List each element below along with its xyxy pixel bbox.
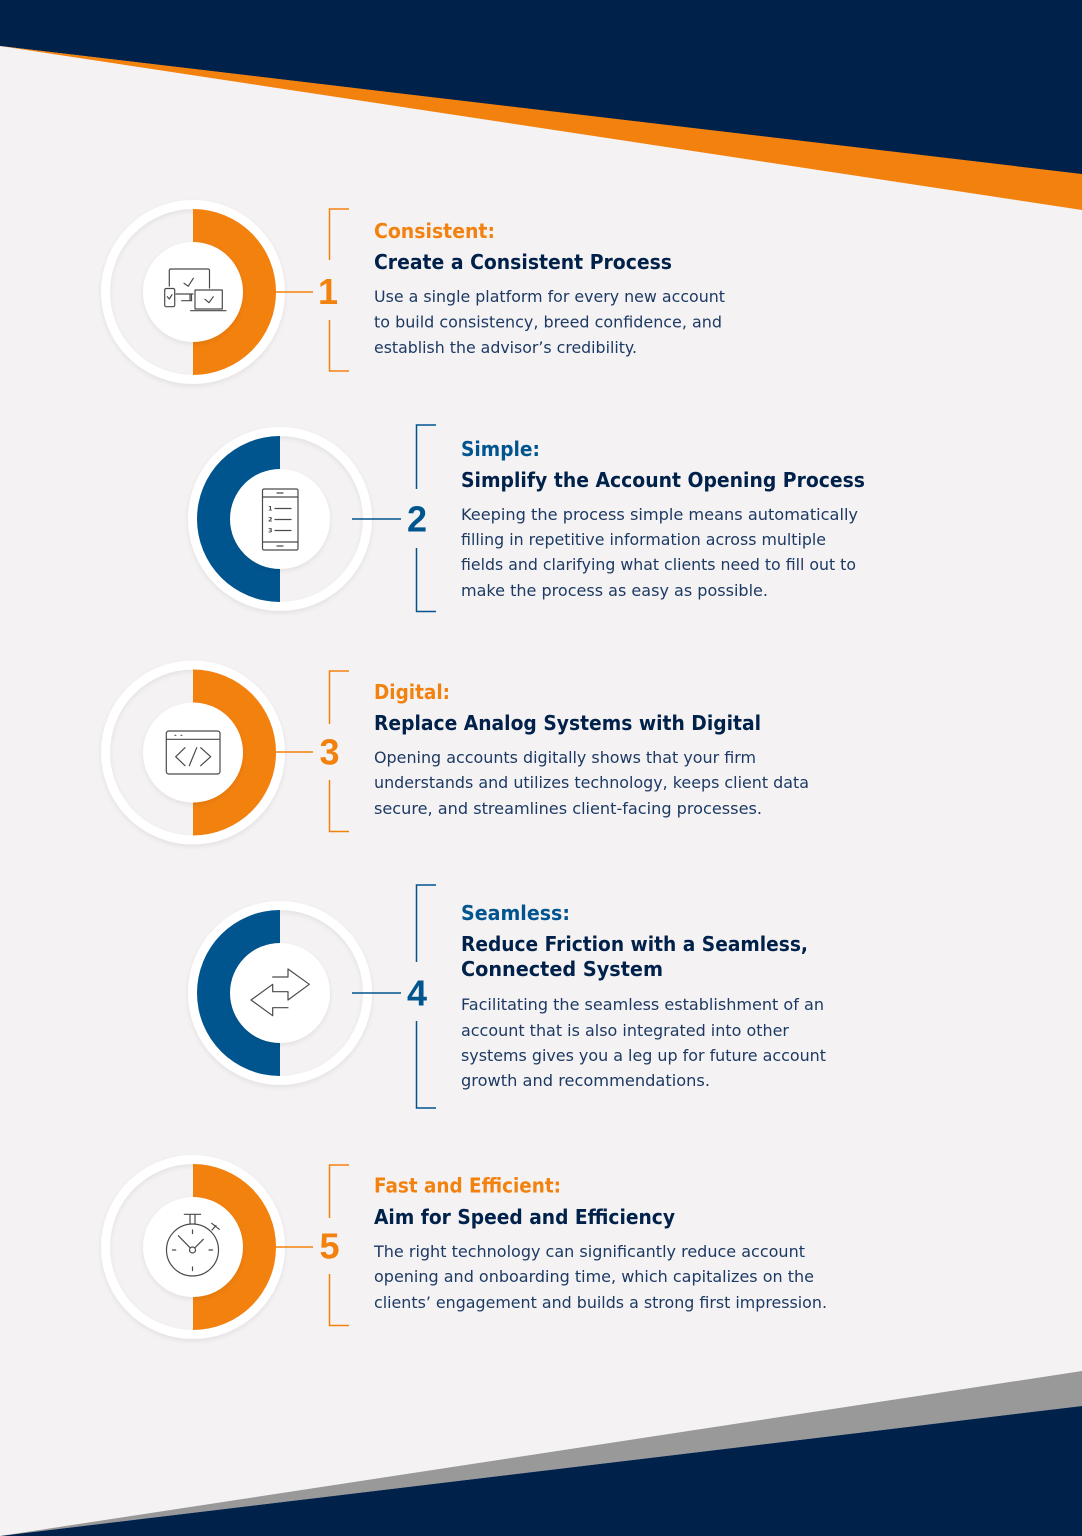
step 5 number: 5: [319, 1226, 340, 1266]
step 2 number: 2: [407, 498, 427, 540]
step 3 bracket: [330, 671, 349, 832]
step 2 connector: [352, 518, 401, 520]
step 4 text: [461, 901, 826, 1090]
step 5 text: opening and onboarding time, which capitalizes on the: [374, 1267, 814, 1286]
icon: phone with numbered list: 1: [268, 504, 273, 512]
step 1 bracket: [330, 209, 349, 371]
step 3 text: [374, 680, 809, 818]
step 1 text: Use a single platform for every new account: [374, 287, 725, 306]
step 4 text: Reduce Friction with a Seamless,: [461, 932, 808, 956]
step 1 text: [374, 219, 725, 357]
step 1 donut: [106, 204, 280, 380]
step 1 text: to build consistency, breed confidence, and: [374, 312, 722, 332]
top orange stripe: [0, 46, 1082, 210]
icon: devices with checkmarks: [165, 269, 226, 311]
step 1 number: 1: [318, 271, 338, 312]
step 2 text: fields and clarifying what clients need to fill out to: [461, 555, 856, 574]
icon: browser window with code: [166, 731, 220, 774]
step 1 connector: [276, 291, 313, 293]
step 4: [192, 885, 826, 1108]
top navy band: [0, 0, 1082, 175]
bottom navy band: [0, 1406, 1082, 1536]
step 1 text: Consistent:: [374, 219, 495, 243]
step 4 text: systems gives you a leg up for future account: [461, 1046, 826, 1065]
step 1 text: establish the advisor’s credibility.: [374, 338, 637, 357]
step 2 text: [461, 437, 865, 600]
step 4 text: Seamless:: [461, 901, 570, 925]
step 2: [192, 425, 865, 612]
step 4 text: account that is also integrated into other: [461, 1021, 789, 1040]
step 4 donut: [192, 906, 368, 1080]
step 5: [106, 1160, 827, 1334]
step 3 text: Replace Analog Systems with Digital: [374, 711, 761, 735]
step 5 text: [373, 1174, 827, 1312]
step 3 donut: [106, 665, 280, 840]
icon: phone with numbered list: [262, 489, 298, 550]
step 2 text: make the process as easy as possible.: [461, 581, 768, 600]
icon: two opposing arrows: [251, 969, 309, 1016]
step 5 connector: [276, 1246, 313, 1248]
step 5 text: Aim for Speed and Efficiency: [374, 1205, 675, 1229]
step 5 text: Fast and Efficient:: [374, 1174, 561, 1198]
step 3 text: Opening accounts digitally shows that your firm: [374, 748, 756, 767]
step 4 connector: [352, 992, 401, 994]
step 3 number: 3: [319, 732, 340, 772]
step 2 text: Simplify the Account Opening Process: [461, 468, 865, 492]
step 2 bracket: [416, 425, 436, 612]
step 1: [106, 204, 725, 380]
step 5 text: The right technology can significantly reduce account: [373, 1242, 805, 1261]
step 3 text: understands and utilizes technology, keeps client data: [374, 773, 809, 792]
step 2 text: filling in repetitive information across multiple: [461, 530, 826, 549]
step 4 text: Connected System: [461, 957, 663, 981]
step 3 text: secure, and streamlines client-facing processes.: [374, 799, 762, 818]
step 3 connector: [276, 751, 313, 753]
step 5 text: clients’ engagement and builds a strong first impression.: [374, 1293, 827, 1312]
step 4 number: 4: [407, 972, 427, 1014]
step 2 text: Keeping the process simple means automatically: [461, 505, 858, 524]
step 5 bracket: [330, 1165, 349, 1326]
step 3 text: Digital:: [374, 680, 450, 704]
step 4 bracket: [416, 885, 436, 1108]
bottom grey stripe: [0, 1371, 1082, 1536]
step 1 text: Create a Consistent Process: [374, 250, 672, 274]
step 2 donut: [192, 432, 368, 606]
step 4 text: growth and recommendations.: [461, 1071, 710, 1090]
step 5 donut: [106, 1160, 280, 1334]
icon: phone with numbered list: 2: [268, 516, 273, 524]
step 3: [106, 665, 809, 840]
step 4 text: Facilitating the seamless establishment of an: [461, 995, 824, 1014]
icon: stopwatch: [166, 1214, 219, 1276]
step 2 text: Simple:: [461, 437, 540, 461]
icon: phone with numbered list: 3: [268, 526, 273, 534]
